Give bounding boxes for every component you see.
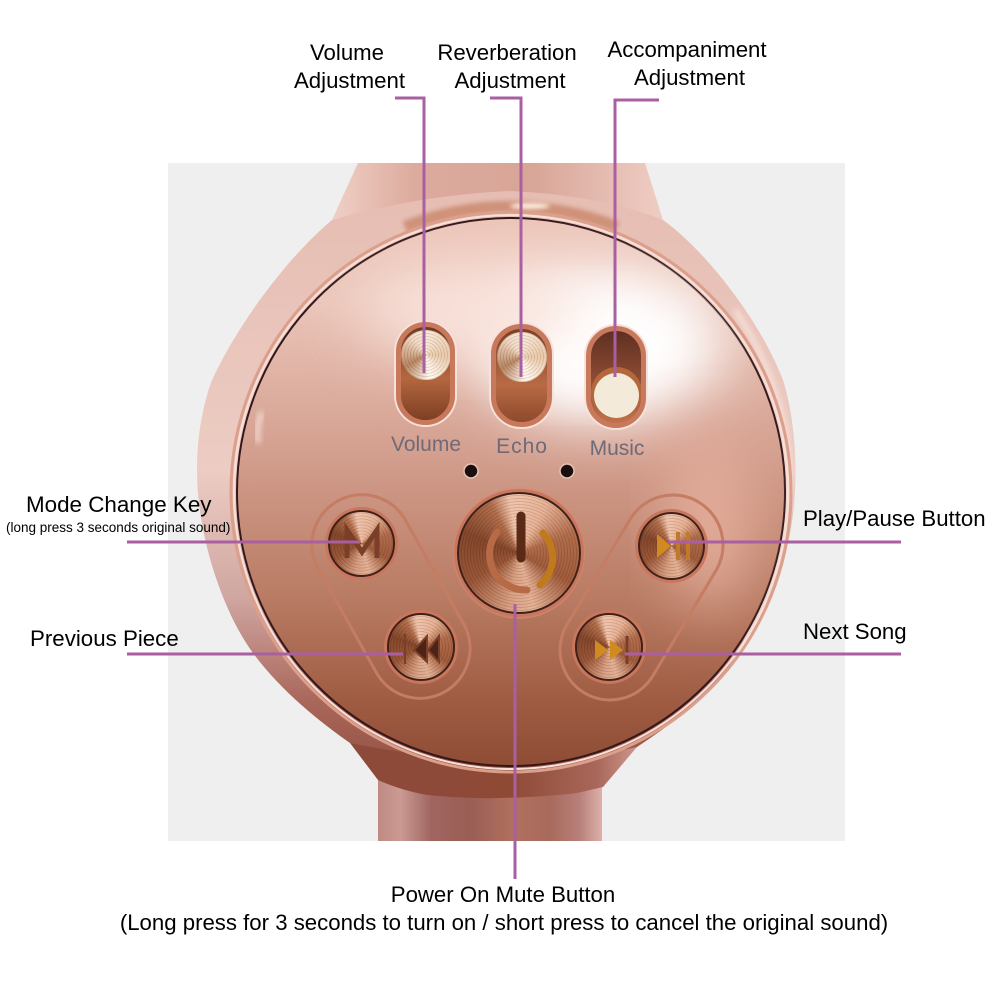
button: play pause bbox=[638, 512, 705, 580]
echo slider knob bbox=[497, 332, 547, 382]
icon: M bbox=[347, 530, 377, 558]
band highlight bbox=[510, 203, 550, 209]
volume slider knob bbox=[401, 330, 451, 380]
button: previous bbox=[387, 613, 455, 681]
text: Mode Change Key: Mode Change Key bbox=[26, 492, 211, 517]
text: Power On Mute Button: (Long press for 3 seconds to turn on / short press to cancel the original sound) bbox=[120, 910, 888, 935]
text: Power On Mute Button bbox=[120, 882, 888, 935]
collar bbox=[350, 743, 637, 798]
text: Reverberation Adjustment: Reverberation bbox=[437, 40, 577, 65]
label: Music: Music bbox=[590, 437, 644, 460]
leader: volume bbox=[395, 98, 424, 373]
panel: grey photo backdrop bbox=[168, 163, 845, 841]
control: echo slider bbox=[491, 324, 552, 427]
microphone body bbox=[197, 163, 796, 841]
ring around the disc bbox=[231, 212, 791, 772]
text: Play/Pause Button: Play/Pause Button bbox=[803, 506, 986, 531]
button: mode bbox=[328, 510, 395, 577]
leader: play pause bbox=[668, 540, 901, 544]
text: Accompaniment Adjustment bbox=[607, 37, 767, 90]
leader: next bbox=[625, 652, 901, 656]
copper band above the disc bbox=[405, 207, 617, 227]
disc bbox=[237, 218, 785, 766]
icon: next bar bbox=[626, 636, 628, 664]
text: Accompaniment Adjustment: Accompaniment bbox=[607, 37, 767, 62]
stem bbox=[378, 780, 602, 841]
text: Accompaniment Adjustment: Adjustment bbox=[634, 65, 745, 90]
control: volume slider bbox=[396, 322, 455, 425]
outer shell bbox=[197, 191, 795, 760]
left button pill bbox=[312, 495, 470, 698]
text: Reverberation Adjustment bbox=[437, 40, 577, 93]
text: Volume Adjustment: Volume bbox=[310, 40, 384, 65]
control: music slider bbox=[586, 326, 646, 428]
right rim highlight bbox=[735, 310, 790, 640]
icon: next bbox=[595, 640, 623, 660]
text: Previous Piece: Previous Piece bbox=[30, 626, 179, 651]
indicator lights bbox=[464, 464, 574, 478]
neck top bbox=[332, 163, 663, 220]
leader: previous bbox=[127, 652, 403, 656]
pale ring bbox=[234, 215, 788, 769]
right button pill bbox=[560, 495, 723, 700]
text: Power On Mute Button: Power On Mute Button bbox=[391, 882, 615, 907]
text: Volume Adjustment bbox=[294, 40, 405, 93]
text: Reverberation Adjustment: Adjustment bbox=[454, 68, 566, 93]
leader: accompaniment bbox=[615, 100, 659, 377]
text: long press note: (long press 3 seconds original sound) bbox=[6, 520, 230, 535]
leader: reverberation bbox=[490, 98, 521, 377]
icon: previous bbox=[405, 634, 439, 664]
icon: pause bars bbox=[678, 532, 688, 560]
icon: power bbox=[489, 516, 553, 590]
power button halo bbox=[453, 487, 585, 619]
text: Volume Adjustment: Adjustment bbox=[294, 68, 405, 93]
button: next bbox=[575, 613, 643, 681]
label: Echo: Echo bbox=[496, 435, 548, 458]
button: power bbox=[457, 492, 581, 614]
text: Next Song: Next Song bbox=[803, 619, 907, 644]
leader: mode bbox=[127, 540, 360, 544]
label: Volume: Volume bbox=[391, 433, 461, 456]
leader: power bbox=[514, 604, 516, 879]
icon: play pause bbox=[657, 534, 671, 558]
music slider knob bbox=[594, 373, 639, 418]
